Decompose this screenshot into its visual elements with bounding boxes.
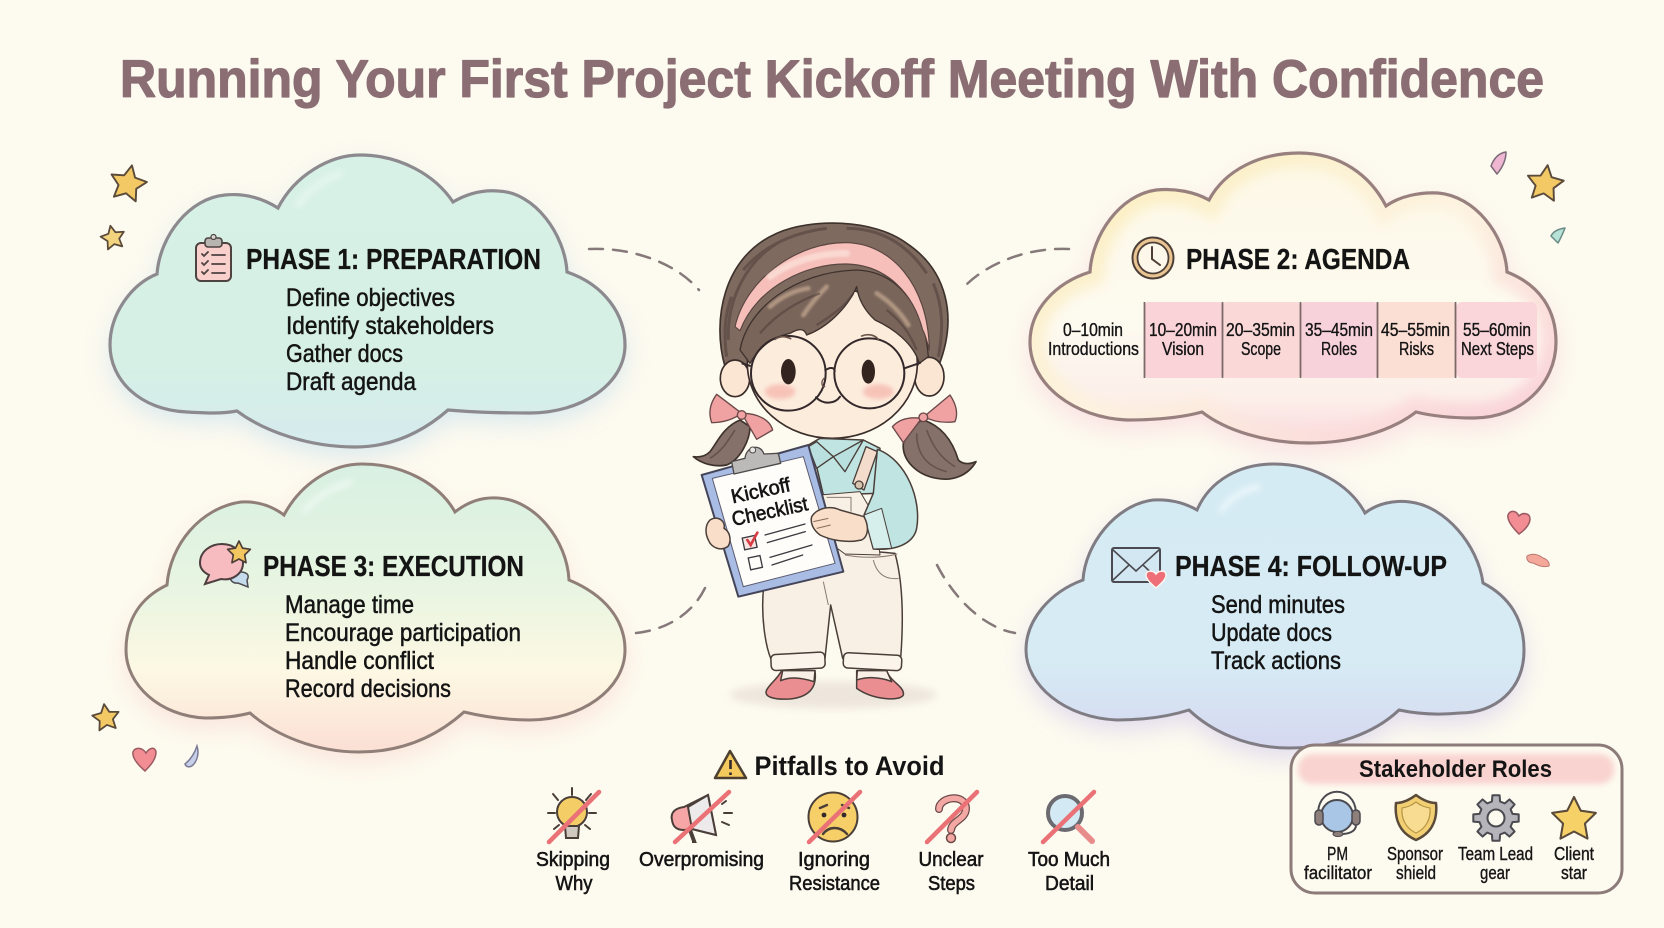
pitfall: skipping why: Why (556, 873, 592, 895)
panel: phase 3 execution (126, 464, 625, 762)
list: execution tasks: Handle conflict (285, 647, 434, 675)
hands (706, 508, 867, 549)
agenda timeline: 35–45min (1305, 320, 1373, 340)
heading: Stakeholder Roles (1359, 756, 1552, 783)
role: client star (1552, 797, 1596, 883)
hair (720, 223, 948, 367)
icon: clipboard (196, 234, 231, 281)
panel: phase 2 agenda (1030, 153, 1556, 453)
agenda timeline: 20–35min (1226, 320, 1295, 340)
pitfall: ignoring resistance: Resistance (789, 873, 880, 895)
agenda timeline: Risks (1399, 339, 1434, 359)
pigtails (693, 420, 976, 479)
list: preparation tasks: Gather docs (286, 340, 403, 368)
list: execution tasks: Record decisions (285, 675, 451, 703)
icon: clock (1132, 238, 1174, 278)
pitfall: overpromising: Overpromising (639, 849, 764, 871)
agenda timeline: Vision (1162, 339, 1204, 359)
section: pitfalls to avoid (536, 751, 1110, 895)
bangs (740, 270, 928, 363)
agenda timeline: Introductions (1048, 339, 1139, 359)
icon: envelope with heart (1112, 548, 1166, 588)
agenda timeline (1048, 302, 1537, 378)
sleeve (864, 449, 918, 549)
pitfall: ignoring resistance (789, 792, 880, 895)
list: preparation tasks: Define objectives (286, 284, 455, 312)
pitfall: overpromising (639, 792, 764, 871)
list: follow-up tasks: Track actions (1211, 647, 1341, 675)
pitfall: too much detail: Detail (1045, 873, 1094, 895)
panel: stakeholder roles (1291, 745, 1622, 893)
agenda timeline: 0–10min (1063, 320, 1123, 340)
shirt torso (808, 438, 880, 495)
arrow: connector to phase 3 (636, 588, 705, 633)
role: client star: Client (1554, 844, 1594, 864)
list: preparation tasks: Identify stakeholders (286, 312, 494, 340)
agenda timeline: Scope (1241, 339, 1281, 359)
pitfall: unclear steps (918, 792, 984, 895)
clipboard title line 2: Checklist (730, 493, 810, 531)
header band (1298, 754, 1614, 784)
pitfall: unclear steps: Unclear (918, 849, 984, 871)
heading: PHASE 2: AGENDA (1186, 244, 1410, 276)
agenda timeline: 10–20min (1149, 320, 1217, 340)
icon: warning triangle (715, 751, 746, 778)
bib (817, 492, 880, 555)
pants and overalls (763, 547, 902, 658)
role: sponsor shield: Sponsor (1387, 844, 1443, 864)
title: Running Your First Project Kickoff Meeting With Confidence (120, 50, 1544, 109)
shoes (766, 671, 903, 699)
checklist items (742, 524, 812, 570)
role: team lead gear (1458, 795, 1533, 883)
list: follow-up tasks (1211, 591, 1345, 675)
cheeks (765, 384, 894, 399)
pitfall: too much detail: Too Much (1028, 849, 1110, 871)
list: execution tasks: Manage time (285, 591, 414, 619)
list: follow-up tasks: Send minutes (1211, 591, 1345, 619)
list: preparation tasks: Draft agenda (286, 368, 416, 396)
arrow: connector to phase 4 (937, 565, 1015, 633)
agenda timeline: Next Steps (1461, 339, 1534, 359)
pitfall: skipping why (536, 788, 610, 895)
cuffs (771, 652, 902, 671)
list: preparation tasks (286, 284, 494, 396)
role: client star: star (1561, 863, 1587, 883)
heading: PHASE 4: FOLLOW-UP (1175, 551, 1447, 583)
ears (720, 357, 944, 397)
agenda timeline: 55–60min (1463, 320, 1531, 340)
role: PM facilitator: facilitator (1304, 863, 1372, 883)
list: execution tasks (285, 591, 521, 703)
arrow: connector to phase 2 (967, 249, 1069, 284)
list: follow-up tasks: Update docs (1211, 619, 1332, 647)
agenda timeline: 45–55min (1381, 320, 1450, 340)
pitfall: unclear steps: Steps (928, 873, 975, 895)
role: PM facilitator: PM (1327, 844, 1348, 864)
panel: phase 1 preparation (110, 155, 625, 457)
pitfall: too much detail (1028, 792, 1110, 895)
headband (735, 243, 929, 350)
decorations: stars, hearts and confetti (91, 152, 1566, 771)
role: PM facilitator (1304, 792, 1372, 883)
role: team lead gear: Team Lead (1458, 844, 1533, 864)
panel: phase 4 follow-up (1026, 464, 1524, 758)
list: execution tasks: Encourage participation (285, 619, 521, 647)
bows (710, 394, 957, 443)
pitfall: skipping why: Skipping (536, 849, 610, 871)
heading: PHASE 3: EXECUTION (263, 551, 524, 583)
heading: PHASE 1: PREPARATION (246, 244, 541, 276)
character: girl holding kickoff checklist (693, 223, 976, 708)
face (747, 288, 917, 438)
collar and strap (808, 440, 877, 490)
clipboard (702, 445, 843, 597)
eyes and mouth (775, 335, 878, 403)
icon: chat bubbles with star (200, 541, 250, 587)
agenda timeline: Roles (1321, 339, 1357, 359)
pitfall: ignoring resistance: Ignoring (798, 849, 870, 871)
role: sponsor shield: shield (1396, 863, 1436, 883)
role: team lead gear: gear (1480, 863, 1510, 883)
heading: Pitfalls to Avoid (754, 751, 944, 781)
arrow: connector to phase 1 (589, 249, 699, 290)
glasses (742, 336, 921, 411)
clipboard title: Kickoff (729, 474, 793, 508)
role: sponsor shield (1387, 795, 1443, 883)
